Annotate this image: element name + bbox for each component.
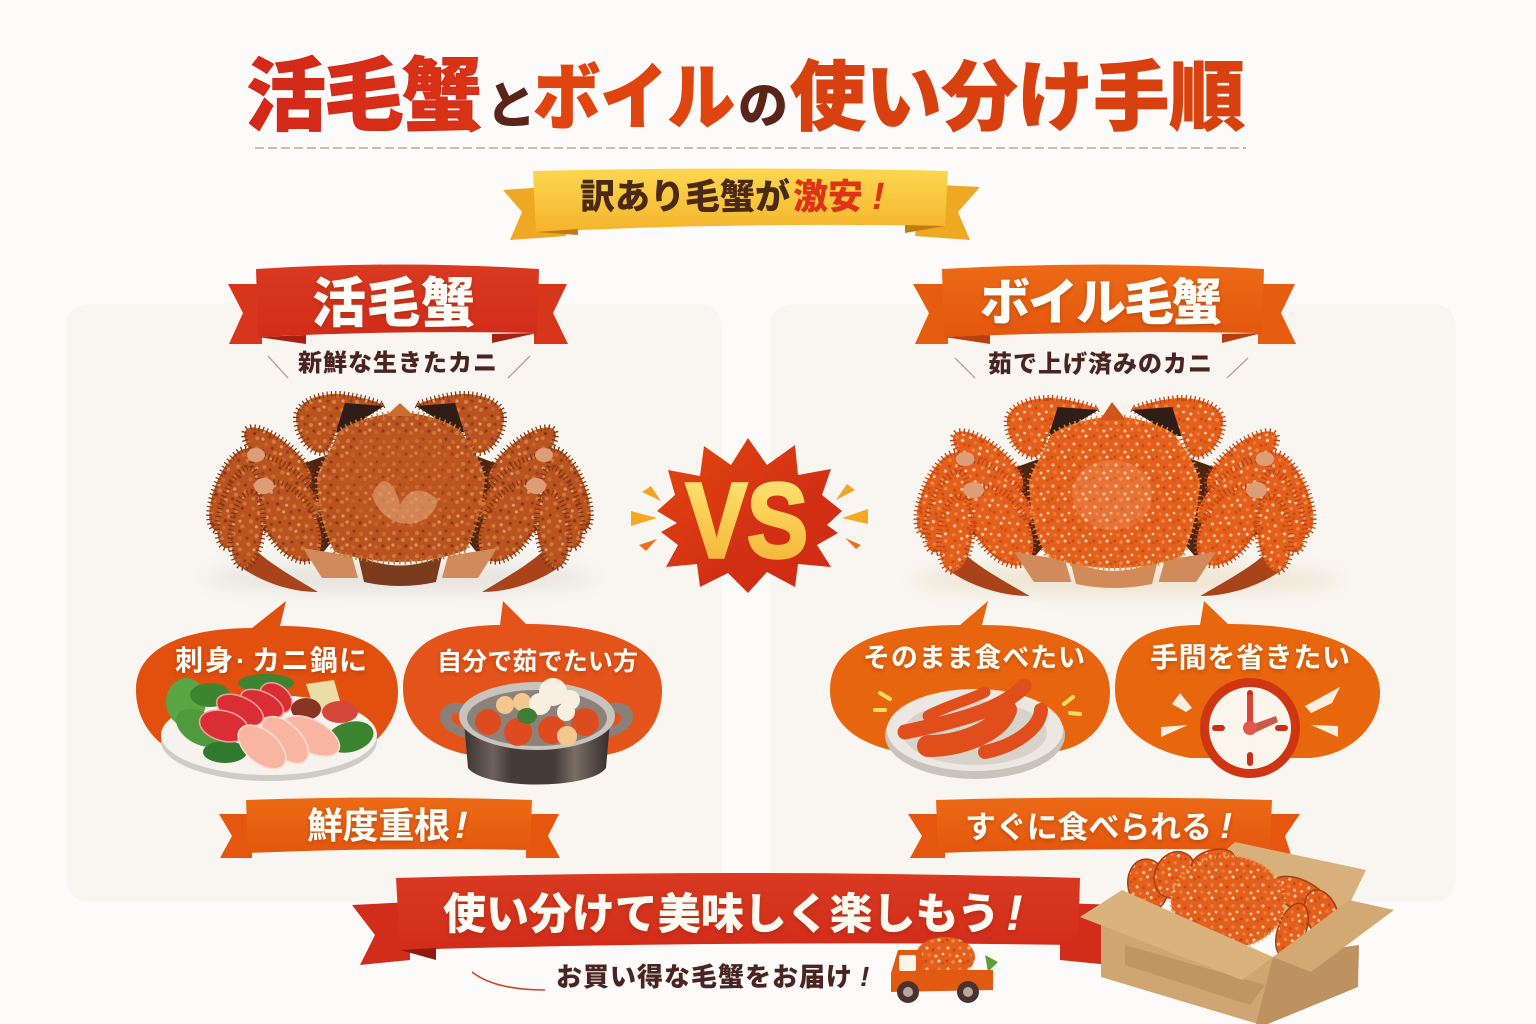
heading ribbon: boiled crab bbox=[913, 264, 1296, 344]
subtitle: boiled crab: 茹で上げ済みのカニ bbox=[988, 351, 1212, 378]
yellow ribbon: discount headline: 訳あり毛蟹が bbox=[580, 177, 790, 217]
crab carapace bbox=[1029, 416, 1200, 568]
bubble: save time bbox=[1115, 601, 1380, 778]
bubble: save time: 手間を省きたい bbox=[1150, 642, 1350, 673]
closing ribbon: 使い分けて美味しく楽しもう bbox=[443, 891, 1000, 939]
box body right bbox=[1256, 945, 1359, 1024]
icon: rays bbox=[1161, 687, 1340, 737]
bubble: sashimi and crab hotpot: 刺身 bbox=[175, 645, 233, 676]
title: 使い分け手順 bbox=[790, 56, 1245, 141]
crab legs and claws bbox=[200, 394, 600, 592]
heading ribbon: live crab: 活毛蟹 bbox=[312, 274, 475, 334]
title bbox=[246, 52, 1245, 141]
ribbon: ready to eat: すぐに食べられる bbox=[965, 810, 1212, 845]
panel: boiled crab bbox=[770, 304, 1456, 902]
bubble: sashimi and crab hotpot: カニ鍋に bbox=[252, 645, 367, 676]
closing ribbon bbox=[352, 873, 1120, 965]
title: ボイル bbox=[533, 59, 735, 139]
illustration: live crab bbox=[200, 394, 600, 592]
ribbon: ready to eat: ! bbox=[1220, 805, 1232, 846]
box back flap bbox=[1215, 842, 1366, 930]
delivery caption: お買い得な毛蟹をお届け bbox=[556, 962, 852, 992]
ribbon: ready to eat bbox=[908, 798, 1300, 858]
title: の bbox=[738, 78, 788, 134]
box flap left bbox=[1080, 890, 1273, 980]
title: と bbox=[486, 78, 536, 134]
crab in box bbox=[1124, 845, 1346, 961]
bubble: boil it yourself: 自分で茹でたい方 bbox=[437, 648, 638, 676]
bubble: sashimi and crab hotpot: · bbox=[236, 645, 245, 676]
icon: delivery truck bbox=[891, 937, 998, 1003]
burst: VS: VS bbox=[686, 462, 808, 580]
closing ribbon: ! bbox=[1006, 885, 1023, 941]
heading ribbon: boiled crab: ボイル毛蟹 bbox=[980, 275, 1222, 331]
crab legs and claws bbox=[907, 398, 1323, 596]
ribbon: freshness first bbox=[219, 798, 560, 858]
title dashed rule bbox=[255, 147, 1246, 149]
yellow ribbon: discount headline: ! bbox=[872, 176, 885, 218]
bubble: eat as is bbox=[830, 601, 1110, 779]
icon: sashimi plate bbox=[161, 674, 377, 781]
bubble: sashimi and crab hotpot bbox=[136, 601, 398, 781]
heading ribbon: live crab bbox=[228, 264, 568, 344]
icon: cardboard box with crab bbox=[1080, 842, 1394, 1024]
title: 活毛蟹 bbox=[246, 52, 482, 141]
crab carapace bbox=[317, 412, 485, 562]
bubble: boil it yourself bbox=[403, 601, 662, 784]
subtitle: live crab: 新鮮な生きたカニ bbox=[298, 350, 497, 377]
ribbon: freshness first: 鮮度重根 bbox=[307, 805, 450, 846]
panel: live crab bbox=[66, 304, 722, 902]
ribbon: freshness first: ! bbox=[455, 805, 468, 847]
burst: VS bbox=[631, 438, 868, 593]
box flap right bbox=[1273, 900, 1394, 972]
yellow ribbon: discount headline bbox=[503, 168, 980, 240]
illustration: boiled crab bbox=[907, 398, 1340, 596]
icon: clock bbox=[1200, 678, 1300, 778]
icon: cooking pot bbox=[440, 678, 633, 784]
box body left bbox=[1101, 925, 1273, 1024]
yellow ribbon: discount headline: 激安 bbox=[793, 178, 863, 217]
bubble: eat as is: そのまま食べたい bbox=[863, 643, 1085, 673]
delivery caption: ! bbox=[860, 961, 869, 992]
icon: plate of crab legs bbox=[875, 686, 1080, 779]
